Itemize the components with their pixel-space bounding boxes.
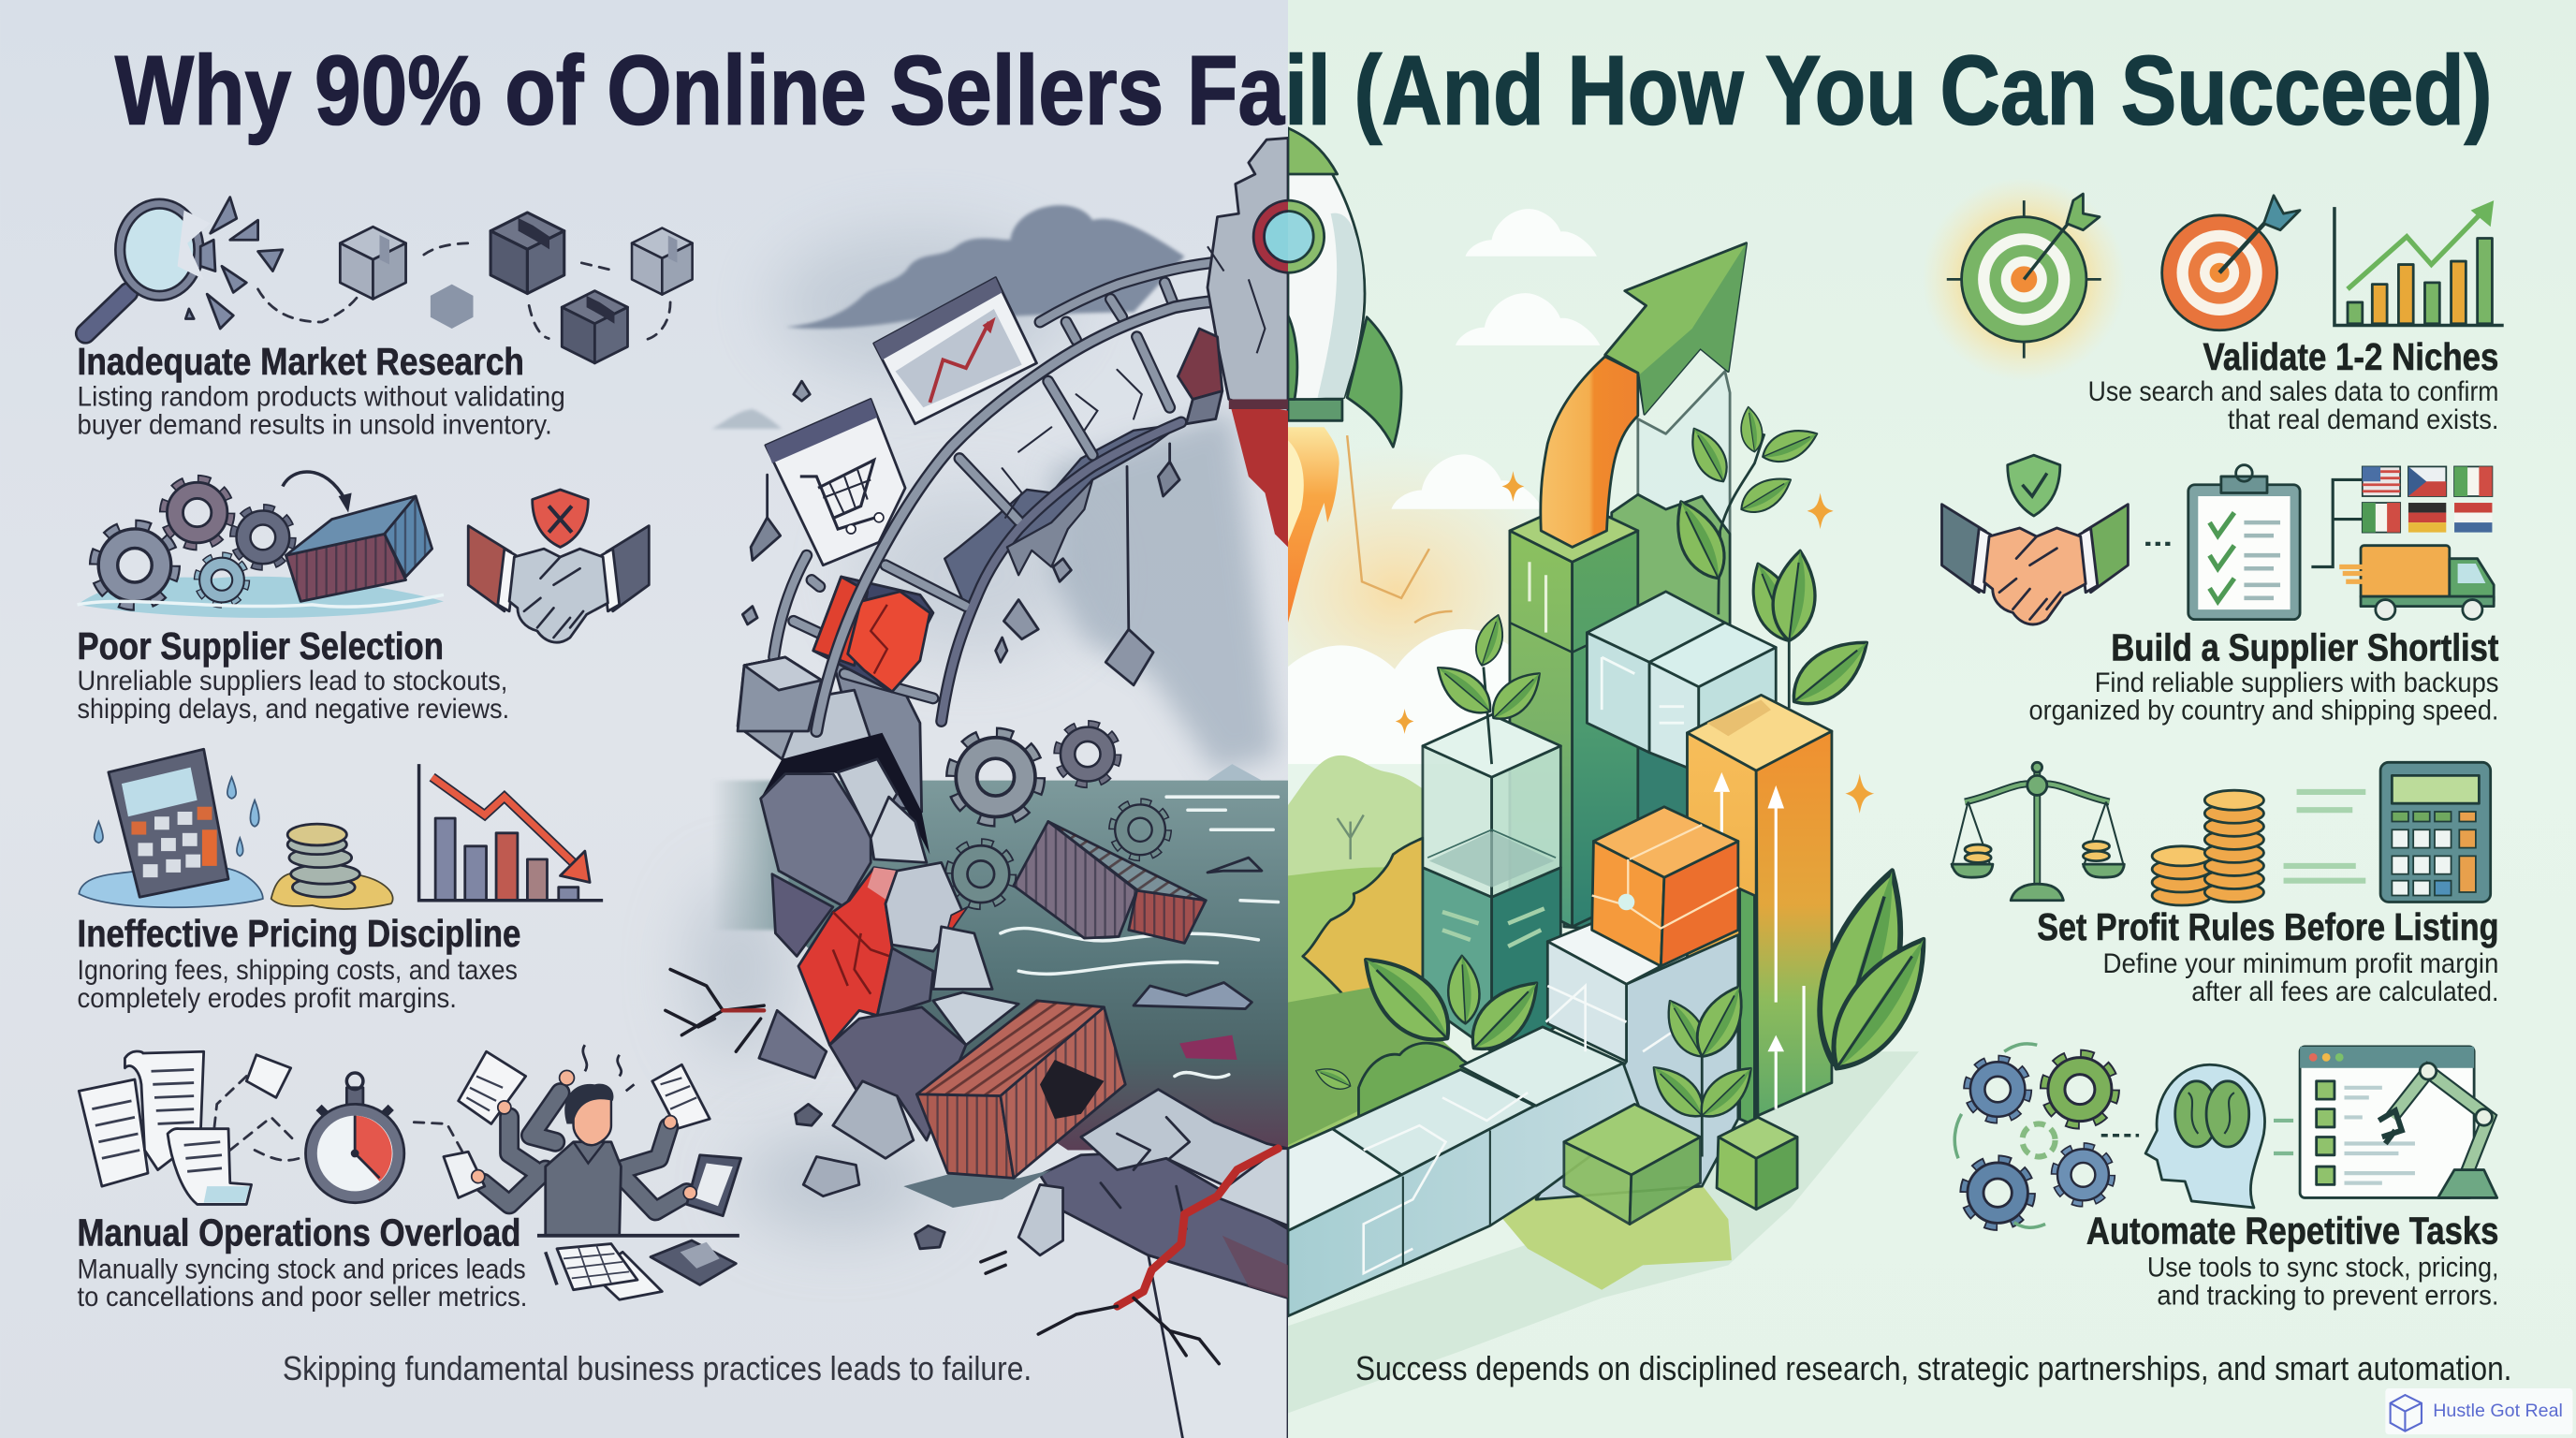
icon: coin stacks xyxy=(2152,790,2263,905)
item: profit rules xyxy=(1952,762,2498,1007)
description: Listing random products without validating xyxy=(78,381,565,412)
green cubes xyxy=(1564,1104,1797,1224)
broken rocket half xyxy=(1177,137,1288,547)
description: Ignoring fees, shipping costs, and taxes xyxy=(78,955,518,986)
red cracked block xyxy=(813,577,933,692)
clouds xyxy=(1288,209,1601,764)
debris xyxy=(742,381,1179,685)
icon: dashboard with robot arm xyxy=(2300,1047,2497,1197)
description: to cancellations and poor seller metrics. xyxy=(78,1282,527,1313)
gears sinking xyxy=(952,727,1165,902)
icon: cube logo xyxy=(2391,1395,2422,1431)
sinking container xyxy=(1014,822,1206,943)
description: Use tools to sync stock, pricing, xyxy=(2147,1253,2498,1284)
background: failure side xyxy=(0,0,1288,1438)
broken rock under deck xyxy=(1007,479,1092,575)
orange cube xyxy=(1592,807,1738,966)
shadow under columns xyxy=(1288,1051,1919,1413)
description xyxy=(2147,1253,2498,1311)
icon: stopwatch xyxy=(305,1073,404,1203)
icon: handshake with green shield xyxy=(1942,455,2172,624)
heading: Set Profit Rules Before Listing xyxy=(2037,905,2498,948)
icon: boxes with dashed paths xyxy=(258,213,693,363)
back column and translucent glass xyxy=(1564,372,1730,936)
icon: delivery truck xyxy=(2339,546,2494,620)
bridge dark broken deck xyxy=(944,424,1181,608)
watermark badge xyxy=(2385,1388,2572,1434)
green thin column xyxy=(1740,888,1754,1125)
warm glow xyxy=(1288,473,1516,668)
central illustration: rocket and growth columns xyxy=(1203,128,1948,1413)
description: that real demand exists. xyxy=(2228,404,2498,435)
main bridge rail xyxy=(816,301,1234,731)
plants and leaves xyxy=(1312,405,1948,1157)
orange tall column xyxy=(1687,695,1832,1116)
background: success side xyxy=(1288,0,2576,1438)
sea xyxy=(711,764,1288,1151)
chart: falling bars xyxy=(419,764,603,901)
icon: broken magnifier xyxy=(85,198,283,333)
rock pile xyxy=(738,649,1063,1255)
big green column xyxy=(1510,516,1638,927)
heading: Build a Supplier Shortlist xyxy=(2111,626,2498,669)
description: completely erodes profit margins. xyxy=(78,983,457,1014)
description: and tracking to prevent errors. xyxy=(2157,1280,2498,1311)
icon: gears and sinking container xyxy=(78,472,444,618)
description: buyer demand results in unsold inventory. xyxy=(78,409,552,440)
item: validate niches xyxy=(1922,178,2504,435)
description: Use search and sales data to confirm xyxy=(2088,376,2498,407)
pale stepped slab xyxy=(1288,923,1738,1316)
description xyxy=(78,666,509,725)
icon: calculator xyxy=(2380,762,2491,902)
central illustration: collapsing bridge and rocks xyxy=(666,138,1325,1438)
heading: Manual Operations Overload xyxy=(78,1211,520,1254)
heading: Ineffective Pricing Discipline xyxy=(78,912,520,955)
panel: failure causes xyxy=(78,198,741,1313)
glass cubes cluster xyxy=(1587,592,1776,772)
item: poor supplier selection xyxy=(78,472,649,725)
description: Unreliable suppliers lead to stockouts, xyxy=(78,666,507,697)
fallen cargo container xyxy=(916,1001,1125,1178)
arrows between coins and calculator xyxy=(2284,792,2365,881)
description: Manually syncing stock and prices leads xyxy=(78,1254,526,1284)
icon: orange target xyxy=(2162,196,2300,330)
red and black ground cracks xyxy=(666,969,1278,1364)
icon: green target xyxy=(1922,178,2126,381)
description: organized by country and shipping speed. xyxy=(2029,696,2498,726)
description xyxy=(2102,948,2498,1007)
icon: checklist clipboard xyxy=(2188,465,2300,620)
icon: paperwork and receipts xyxy=(79,1051,299,1204)
description xyxy=(78,955,518,1014)
icon: head with brain xyxy=(2145,1064,2293,1208)
brand name: Hustle Got Real xyxy=(2433,1401,2563,1421)
description xyxy=(2029,668,2498,726)
bridge xyxy=(774,263,1211,721)
description xyxy=(2088,376,2498,435)
description: shipping delays, and negative reviews. xyxy=(78,694,509,725)
description xyxy=(78,1254,527,1313)
heading: Inadequate Market Research xyxy=(78,340,524,383)
storm cloud xyxy=(711,205,1184,429)
icon: overwhelmed person xyxy=(414,1045,741,1299)
description xyxy=(78,381,565,440)
panel: success actions xyxy=(1922,178,2504,1311)
icon: country flags xyxy=(2311,466,2492,566)
growth arrow xyxy=(1541,243,1747,547)
item: inadequate market research xyxy=(78,198,693,440)
browser window: shopping cart xyxy=(766,399,905,565)
icon: gears cycle xyxy=(1954,1044,2139,1227)
item: ineffective pricing discipline xyxy=(78,749,603,1014)
icon: handshake with warning shield xyxy=(468,490,649,642)
flame and smoke cracks xyxy=(1288,427,1453,623)
glass column left xyxy=(1423,714,1560,1068)
rocket xyxy=(1288,127,1402,448)
mist xyxy=(690,230,1278,1232)
sparkles xyxy=(1396,471,1874,814)
item: manual operations overload xyxy=(78,1045,741,1313)
icon: melting calculator and coins xyxy=(79,749,393,909)
heading: Poor Supplier Selection xyxy=(78,624,444,668)
description: after all fees are calculated. xyxy=(2191,976,2498,1007)
item: automate tasks xyxy=(1954,1044,2498,1311)
heading: Automate Repetitive Tasks xyxy=(2086,1210,2498,1253)
footer text: failure: Skipping fundamental business practices leads to failure. xyxy=(283,1349,1032,1387)
ground slab xyxy=(1040,1090,1288,1438)
stone block xyxy=(738,657,822,731)
description: Define your minimum profit margin xyxy=(2102,948,2498,979)
item: supplier shortlist xyxy=(1942,455,2498,726)
chart: rising bars xyxy=(2334,200,2504,325)
description: Find reliable suppliers with backups xyxy=(2095,668,2498,698)
browser window: price chart xyxy=(874,278,1036,424)
heading: Validate 1-2 Niches xyxy=(2203,335,2498,378)
hill and shrubs xyxy=(1288,756,1486,1151)
icon: balance scale xyxy=(1952,762,2124,901)
